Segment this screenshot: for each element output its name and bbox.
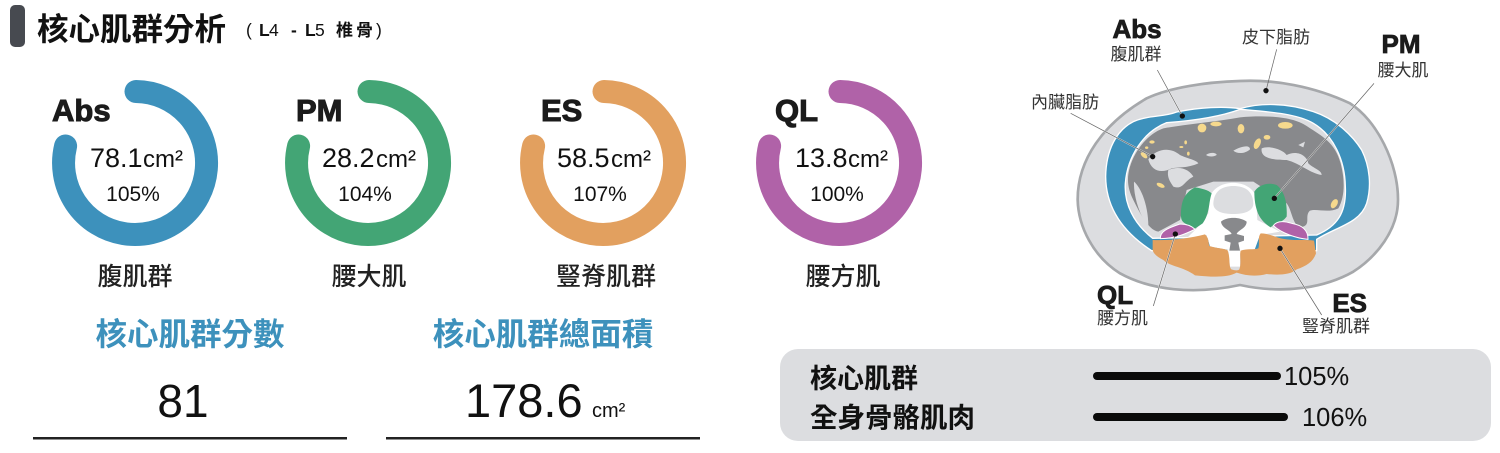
- label: visceral fat: 內臟脂肪: [1031, 93, 1099, 112]
- label: PM: 腰大肌: [1378, 61, 1428, 80]
- label: PM: [1378, 29, 1428, 80]
- heading: core muscle analysis: 核心肌群分析: [37, 11, 226, 47]
- diagram: abdominal cross-section: [1031, 14, 1428, 336]
- ring: psoas major: [296, 92, 440, 291]
- ring: abdominal muscles: 腹肌群: [97, 263, 173, 291]
- ring: quadratus lumborum: 100%: [810, 183, 864, 206]
- ring: abdominal muscles: cm²: [143, 146, 183, 173]
- ring: quadratus lumborum: cm²: [848, 146, 888, 173]
- row: whole body skeletal muscle: 106%: [1302, 404, 1367, 432]
- quadratus lumborum left: [1160, 224, 1195, 239]
- ring: psoas major: cm²: [376, 146, 416, 173]
- label: QL: [1097, 280, 1148, 328]
- heading: core muscle analysis: -: [291, 20, 297, 40]
- row: whole body skeletal muscle: 全身骨骼肌肉: [810, 402, 975, 433]
- stat: total core muscle area: cm²: [592, 400, 626, 422]
- vertebral body: [1213, 186, 1253, 214]
- psoas major right: [1254, 184, 1287, 227]
- leader lines and dots: [1071, 49, 1374, 315]
- stat: total core muscle area: 178.6: [465, 374, 583, 427]
- label: ES: 豎脊肌群: [1302, 317, 1370, 336]
- heading: core muscle analysis: L: [305, 20, 316, 40]
- light fat pockets: [1134, 142, 1322, 227]
- label: QL: QL: [1097, 280, 1133, 310]
- heading: core muscle analysis: 椎: [336, 21, 353, 40]
- label: Abs: [1110, 14, 1162, 64]
- stat: total core muscle area: [386, 316, 700, 440]
- ring: erector spinae: ES: [541, 93, 582, 128]
- ring: erector spinae: 58.5: [557, 143, 610, 173]
- ring: psoas major: PM: [296, 93, 342, 128]
- row: whole body skeletal muscle: [810, 402, 1367, 433]
- panel: comparison bars: [780, 349, 1491, 441]
- ring: erector spinae: cm²: [611, 146, 651, 173]
- label: ES: ES: [1332, 288, 1367, 318]
- ring: quadratus lumborum: 腰方肌: [805, 263, 881, 291]
- stat: core muscle score: 81: [157, 375, 209, 427]
- row: core muscles: 核心肌群: [810, 364, 918, 394]
- stat: core muscle score: [33, 316, 347, 440]
- heading: core muscle analysis: ): [376, 20, 382, 40]
- ring: psoas major: 104%: [338, 183, 392, 206]
- viscera: [1128, 116, 1344, 232]
- heading: core muscle analysis: 骨: [356, 21, 373, 40]
- visceral cavity: [1125, 109, 1345, 238]
- spinal process: [1221, 218, 1247, 251]
- label: PM: PM: [1382, 29, 1420, 59]
- label: Abs: 腹肌群: [1110, 45, 1162, 64]
- ring: abdominal muscles: Abs: [52, 93, 111, 128]
- ring: erector spinae: 豎脊肌群: [556, 263, 656, 291]
- stat: total core muscle area: 核心肌群總面積: [433, 316, 653, 352]
- label: Abs: Abs: [1112, 14, 1162, 44]
- psoas major left: [1181, 187, 1212, 229]
- row: core muscles: 105%: [1284, 363, 1349, 391]
- body outline with subcutaneous fat: [1078, 81, 1398, 290]
- ring: erector spinae: [532, 92, 675, 291]
- ring: quadratus lumborum: QL: [775, 93, 818, 128]
- ring: erector spinae: 107%: [573, 183, 627, 206]
- ring: abdominal muscles: 78.1: [90, 143, 143, 173]
- heading: core muscle analysis: [10, 5, 382, 47]
- ring: quadratus lumborum: 13.8: [795, 143, 848, 173]
- ring: quadratus lumborum: [768, 92, 911, 291]
- quadratus lumborum right: [1273, 222, 1308, 239]
- stat: core muscle score: 核心肌群分數: [95, 316, 285, 352]
- heading: core muscle analysis: (: [246, 20, 252, 40]
- spine white surround: [1187, 183, 1280, 267]
- ring: psoas major: 28.2: [322, 143, 375, 173]
- yellow fat deposits: [1140, 122, 1339, 209]
- heading: core muscle analysis: L: [259, 20, 270, 40]
- heading: core muscle analysis: 5: [315, 20, 325, 40]
- label: subcutaneous fat: 皮下脂肪: [1242, 28, 1310, 47]
- label: ES: [1302, 288, 1370, 336]
- erector spinae: [1153, 233, 1316, 277]
- heading: core muscle analysis: 4: [269, 20, 279, 40]
- row: core muscles: [810, 363, 1349, 394]
- ring: abdominal muscles: [52, 92, 207, 291]
- ring: psoas major: 腰大肌: [331, 263, 407, 291]
- ring: abdominal muscles: 105%: [106, 183, 160, 206]
- label: QL: 腰方肌: [1097, 309, 1148, 328]
- abdominal muscle: [1106, 104, 1369, 251]
